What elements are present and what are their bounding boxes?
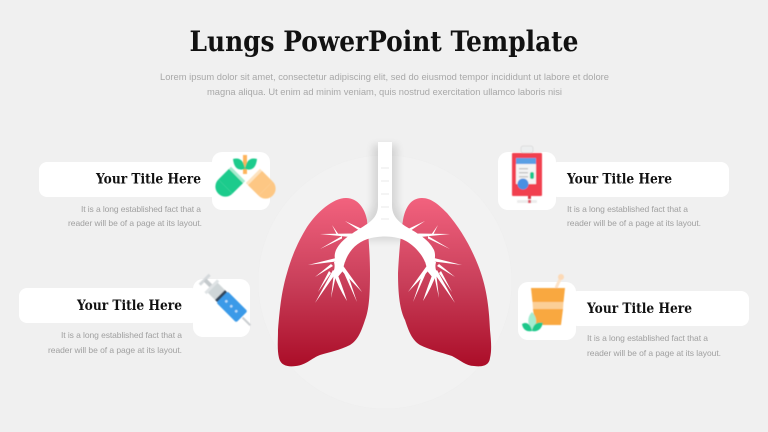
body text: [567, 204, 701, 228]
icon tile: [498, 152, 556, 210]
body text: reader will be of a page at its layout.: [587, 348, 721, 358]
intro text: [160, 72, 609, 98]
body text: [587, 333, 721, 358]
heading: Your Title Here: [586, 301, 692, 317]
left lung: [278, 198, 370, 366]
heading: Your Title Here: [95, 172, 201, 188]
body text: reader will be of a page at its layout.: [48, 345, 182, 355]
body text: It is a long established fact that a: [587, 333, 708, 343]
panel: top right: [498, 146, 729, 228]
icon: pills and leaf: [211, 155, 280, 203]
icon tile: [212, 152, 270, 210]
heading: Your Title Here: [76, 298, 182, 314]
body text: It is a long established fact that a: [61, 330, 182, 340]
heading: Your Title Here: [566, 172, 672, 188]
icon tile: [518, 282, 576, 340]
right lung: [398, 198, 491, 366]
icon tile: [193, 279, 250, 337]
card: [39, 162, 219, 197]
body text: reader will be of a page at its layout.: [567, 218, 701, 228]
body text: It is a long established fact that a: [81, 204, 201, 214]
body text: It is a long established fact that a: [567, 204, 688, 214]
panel: bottom left: [19, 272, 257, 355]
body text: reader will be of a page at its layout.: [68, 218, 202, 228]
icon: syringe: [197, 272, 257, 332]
intro text: magna aliqua. Ut enim ad minim veniam, quis nostrud exercitation ullamco laboris nisi: [207, 87, 562, 98]
body text: [68, 204, 202, 228]
panel: top left: [39, 152, 280, 228]
title: Lungs PowerPoint Template: [190, 25, 578, 58]
panel: bottom right: [518, 274, 749, 358]
icon: IV bag: [512, 146, 542, 203]
background circle: [258, 155, 512, 409]
icon: herbal cup: [522, 274, 565, 331]
lungs illustration: [278, 142, 491, 366]
intro text: Lorem ipsum dolor sit amet, consectetur adipiscing elit, sed do eiusmod tempor incididunt ut labore et dolore: [160, 72, 609, 83]
card: [19, 288, 199, 323]
card: [550, 162, 729, 197]
airway tree: [308, 142, 462, 303]
card: [570, 291, 749, 326]
trachea shadow: [358, 145, 412, 240]
body text: [48, 330, 182, 355]
